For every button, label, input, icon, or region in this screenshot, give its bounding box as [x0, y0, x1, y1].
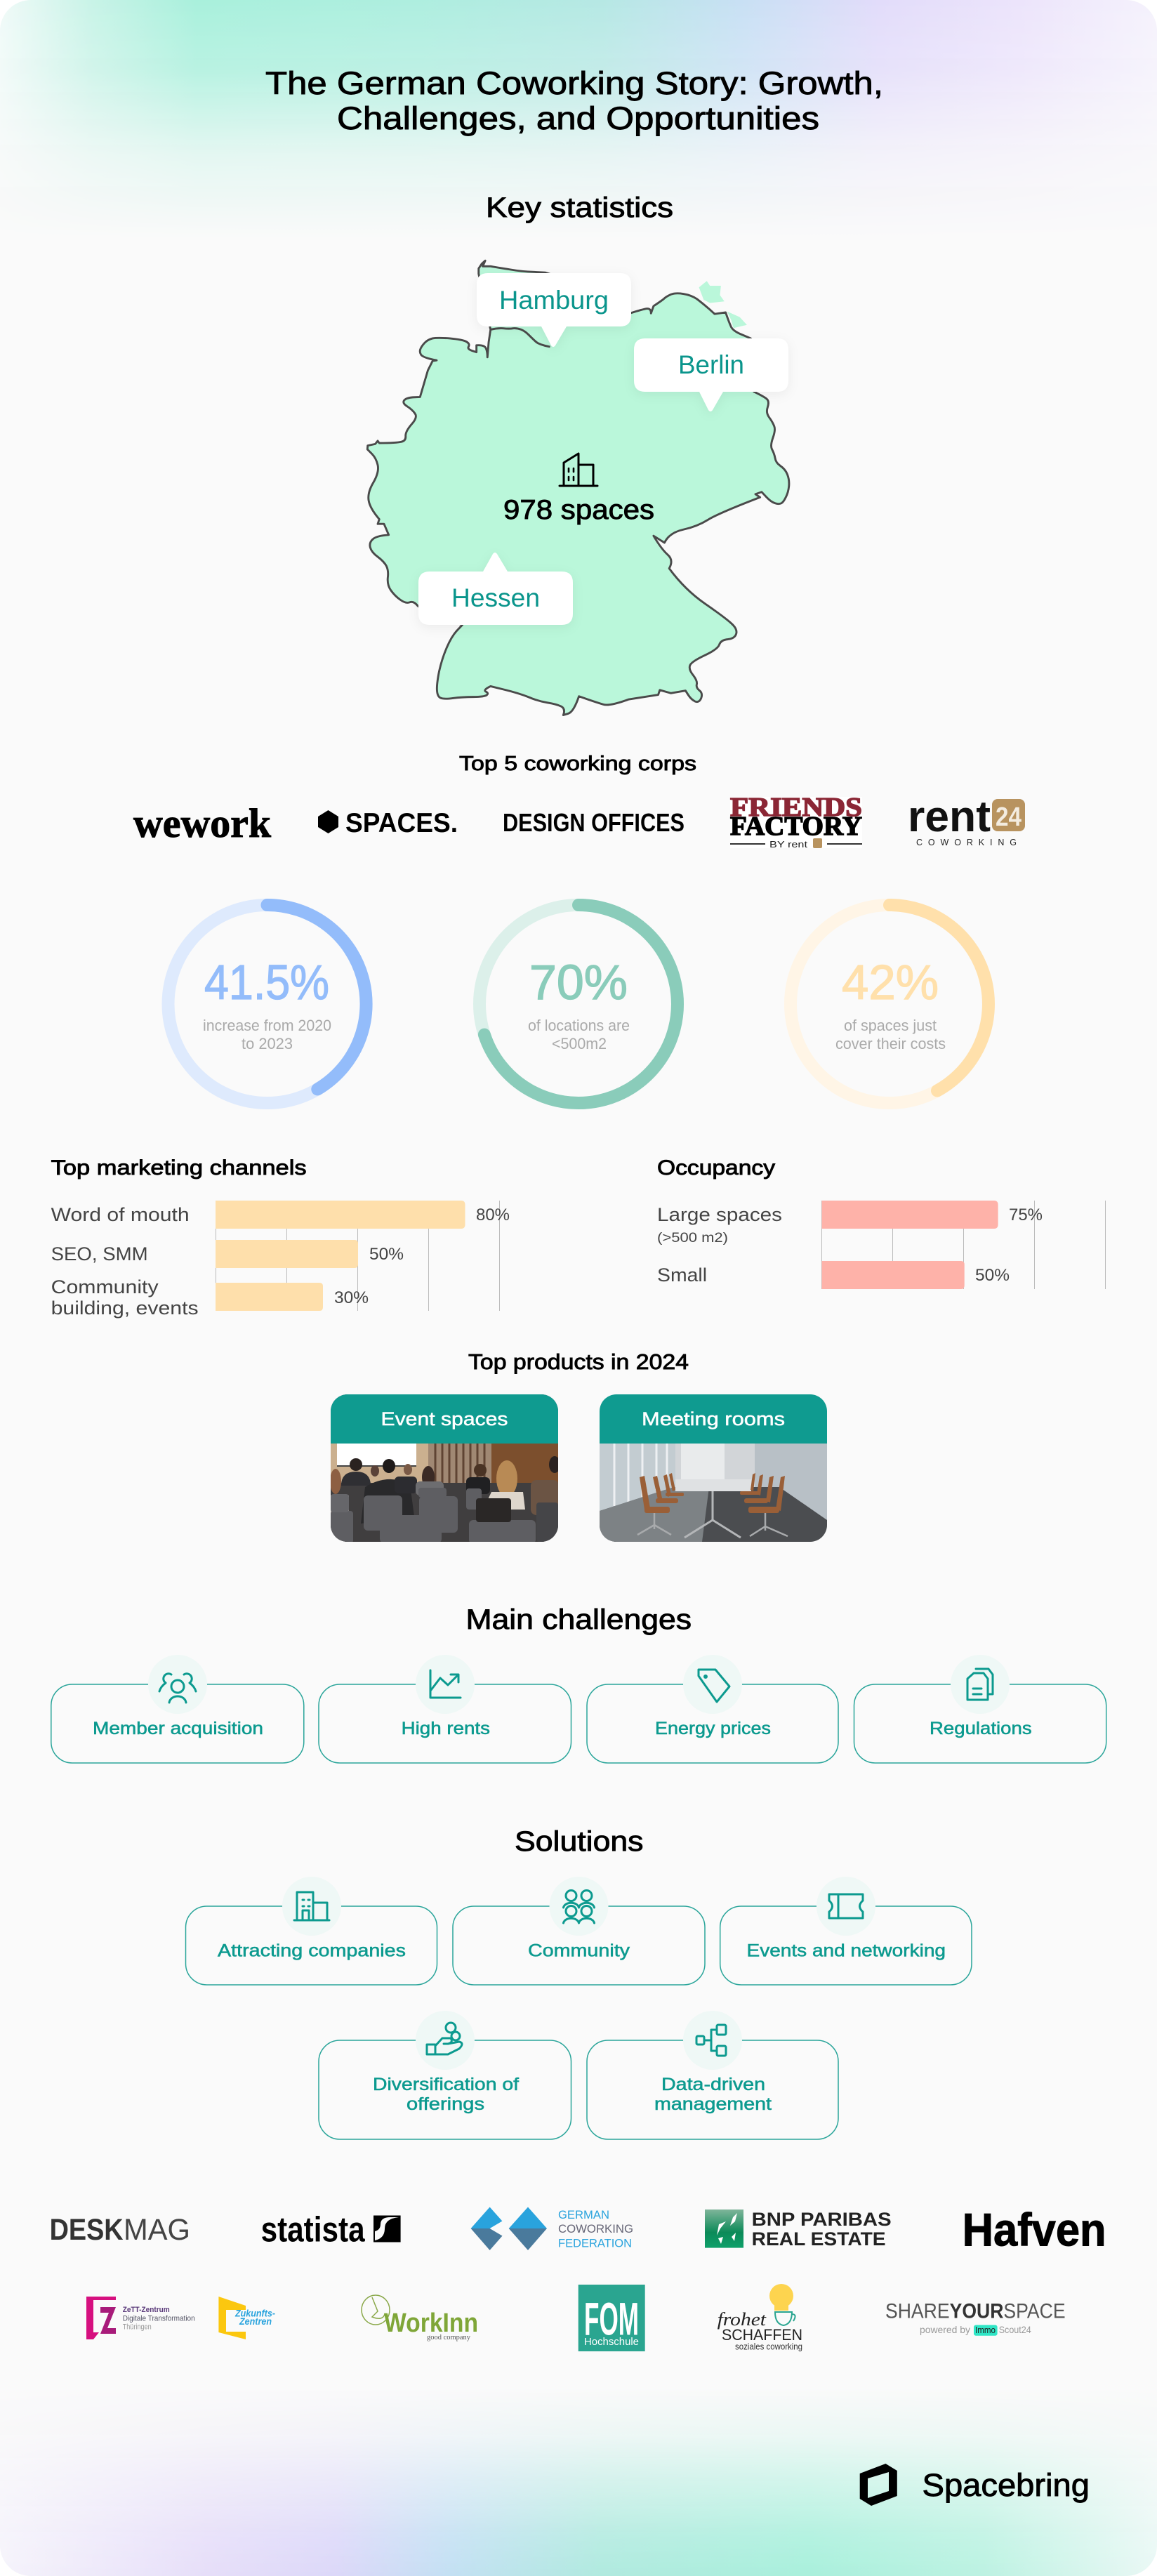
- seats: [331, 1488, 558, 1544]
- logo: zukunfts-zentren: [218, 2297, 275, 2339]
- logo: design offices: DESIGN OFFICES: [503, 808, 685, 837]
- callout: Hessen: Hessen: [451, 583, 540, 612]
- icon: chart: [430, 1670, 461, 1698]
- logo: friends factory: FACTORY: [730, 812, 862, 841]
- heading: main challenges: Main challenges: [466, 1604, 692, 1635]
- donut: 41.5%: [168, 905, 366, 1103]
- donut: 42%: 42%: [842, 955, 939, 1010]
- panel: diversification of offerings: Diversification of: [373, 2075, 519, 2094]
- bar chart: top marketing channels: 80%: [476, 1206, 510, 1224]
- stat: 978 spaces: 978 spaces: [503, 495, 654, 525]
- panel: regulations: [854, 1655, 1106, 1763]
- logo: wework: wework: [133, 800, 272, 846]
- icon: flow diagram: [696, 2025, 726, 2056]
- logo: german coworking federation: FEDERATION: [558, 2237, 632, 2250]
- bar chart: top marketing channels: [51, 1156, 510, 1319]
- logos: coworking corps: [133, 793, 1025, 850]
- logos: sources row 2: [86, 2284, 1066, 2352]
- icon: documents: [967, 1669, 993, 1700]
- donut: 41.5%: 41.5%: [204, 955, 329, 1010]
- logo: zett-zentrum: Digitale Transformation: [123, 2315, 195, 2323]
- bar chart: occupancy: 50%: [975, 1266, 1010, 1285]
- icon: hand with coins: [427, 2023, 462, 2054]
- donut: 70%: of locations are: [528, 1017, 630, 1034]
- card: event spaces: [330, 1394, 560, 1546]
- panel: data-driven management: management: [654, 2094, 772, 2114]
- icon: price tag: [699, 1670, 729, 1702]
- card: event spaces: Event spaces: [381, 1408, 508, 1429]
- logo: friends factory: FRIENDS: [730, 793, 862, 822]
- logo: frohet schaffen: soziales coworking: [735, 2341, 802, 2352]
- logo: german coworking federation: [471, 2207, 633, 2250]
- heading: top 5 coworking corps: Top 5 coworking corps: [459, 753, 696, 775]
- panel: regulations: Regulations: [930, 1719, 1032, 1738]
- donut: 42%: cover their costs: [835, 1035, 946, 1052]
- callout: Berlin: Berlin: [678, 350, 744, 379]
- logo: zukunfts-zentren: Zukunfts-: [234, 2308, 275, 2319]
- icon: building: [560, 454, 597, 486]
- panel: energy prices: [587, 1655, 838, 1763]
- logo: bnp paribas real estate: BNP PARIBAS: [752, 2209, 892, 2230]
- bar chart: top marketing channels: building, events: [51, 1297, 199, 1319]
- logo: rent24: COWORKING: [916, 838, 1017, 847]
- donut: 70%: [480, 905, 677, 1103]
- card: meeting rooms: [600, 1394, 827, 1542]
- donut: 41.5%: to 2023: [242, 1035, 293, 1052]
- logo: deskmag: MAG: [124, 2213, 190, 2247]
- band: [600, 1394, 827, 1444]
- icon: people: [159, 1674, 196, 1703]
- panel: data-driven management: Data-driven: [661, 2075, 765, 2094]
- heading: Occupancy: [657, 1156, 775, 1180]
- bar chart: occupancy: (>500 m2): [657, 1231, 728, 1246]
- logo: rent24: [908, 793, 1025, 847]
- heading: key statistics: Key statistics: [486, 192, 673, 223]
- logo: statista: statista: [261, 2210, 366, 2250]
- bar chart: occupancy: Large spaces: [657, 1204, 782, 1225]
- logos: sources row 1: [50, 2204, 1106, 2256]
- bar chart: top marketing channels: 50%: [369, 1245, 404, 1264]
- logo: friends factory: BY rent: [769, 839, 807, 850]
- logo: zukunfts-zentren: Zentren: [239, 2316, 272, 2327]
- logo: bnp paribas real estate: REAL ESTATE: [752, 2228, 886, 2250]
- icon: community: [563, 1890, 594, 1923]
- heading: top products: Top products in 2024: [468, 1349, 689, 1374]
- logo: zett-zentrum: Thüringen: [123, 2323, 152, 2332]
- heading: solutions: Solutions: [515, 1826, 643, 1857]
- panel: community: Community: [528, 1941, 630, 1960]
- panel: events and networking: Events and networking: [747, 1941, 946, 1960]
- logo: rent24: 24: [996, 802, 1022, 832]
- donut: 42%: of spaces just: [844, 1017, 937, 1034]
- logo: zett-zentrum: ZeTT-Zentrum: [123, 2306, 170, 2314]
- panel: events and networking: [720, 1877, 972, 1985]
- logo: frohet schaffen: frohet: [718, 2309, 767, 2330]
- title: Challenges, and Opportunities: [337, 100, 819, 136]
- panel: data-driven management: [587, 2011, 838, 2139]
- logo: frohet schaffen: SCHAFFEN: [722, 2326, 802, 2344]
- bar chart: top marketing channels: 30%: [334, 1288, 369, 1307]
- callout: Hamburg: Hamburg: [499, 286, 609, 315]
- panel: member acquisition: Member acquisition: [93, 1719, 263, 1738]
- logo: deskmag: [50, 2213, 190, 2247]
- logo: shareyourspace: Immo: [975, 2325, 996, 2335]
- panel: high rents: High rents: [402, 1719, 490, 1738]
- bar chart: top marketing channels: SEO, SMM: [51, 1243, 148, 1264]
- logo: spaces: SPACES.: [345, 808, 458, 838]
- donut: 70%: 70%: [529, 955, 628, 1010]
- panel: attracting companies: Attracting companies: [218, 1941, 406, 1960]
- callout: Berlin: [634, 338, 788, 411]
- logo: spacebring: Spacebring: [923, 2467, 1090, 2503]
- card: meeting rooms: Meeting rooms: [642, 1408, 785, 1429]
- bar chart: occupancy: [657, 1156, 1105, 1289]
- map of Germany: [367, 260, 789, 715]
- logo: german coworking federation: GERMAN: [558, 2208, 609, 2221]
- logo: fom hochschule: Hochschule: [584, 2336, 639, 2348]
- logo: workinn: [362, 2295, 478, 2341]
- logo: zett-zentrum: [86, 2297, 195, 2339]
- logo: fom hochschule: FOM: [584, 2293, 639, 2345]
- people: [330, 1456, 560, 1524]
- bar chart: occupancy: Small: [657, 1264, 707, 1286]
- panel: diversification of offerings: offerings: [406, 2094, 484, 2114]
- logo: shareyourspace: Scout24: [999, 2324, 1031, 2335]
- panel: high rents: [319, 1655, 571, 1763]
- band: [331, 1394, 558, 1444]
- bar chart: occupancy: 75%: [1009, 1206, 1043, 1224]
- logo: workinn: good company: [427, 2334, 470, 2341]
- title: [265, 65, 883, 136]
- logo: fom hochschule: [578, 2285, 645, 2351]
- icon: ticket: [829, 1894, 863, 1918]
- logo: bnp paribas real estate: [705, 2209, 892, 2250]
- logo: german coworking federation: COWORKING: [558, 2222, 633, 2235]
- heading: Top marketing channels: [51, 1156, 307, 1180]
- logo: frohet schaffen: [718, 2284, 802, 2352]
- donut: 41.5%: increase from 2020: [203, 1017, 331, 1034]
- logo: workinn: WorkInn: [384, 2309, 478, 2338]
- bar chart: top marketing channels: Word of mouth: [51, 1204, 190, 1225]
- logo: hafven: Hafven: [963, 2204, 1106, 2256]
- icon: office: [294, 1892, 329, 1920]
- callout: Hessen: [418, 553, 573, 625]
- panel: diversification of offerings: [319, 2011, 571, 2139]
- bar chart: top marketing channels: Community: [51, 1276, 159, 1297]
- panel: attracting companies: [185, 1877, 437, 1985]
- logo: shareyourspace: [885, 2300, 1066, 2336]
- logo: friends factory: [730, 793, 862, 850]
- logo: shareyourspace: powered by: [920, 2324, 970, 2335]
- logo: deskmag: DESK: [50, 2213, 124, 2247]
- panel: energy prices: Energy prices: [655, 1719, 771, 1738]
- logo: spacebring: [860, 2464, 1090, 2506]
- donut: 42%: [791, 905, 989, 1103]
- logo: rent24: rent: [908, 793, 991, 841]
- title: The German Coworking Story: Growth,: [265, 65, 883, 101]
- callout: Hamburg: [477, 273, 631, 347]
- panel: community: [453, 1877, 705, 1985]
- logo: shareyourspace: SHAREYOURSPACE: [885, 2300, 1066, 2323]
- panel: member acquisition: [51, 1655, 304, 1763]
- donut: 70%: <500m2: [552, 1035, 607, 1052]
